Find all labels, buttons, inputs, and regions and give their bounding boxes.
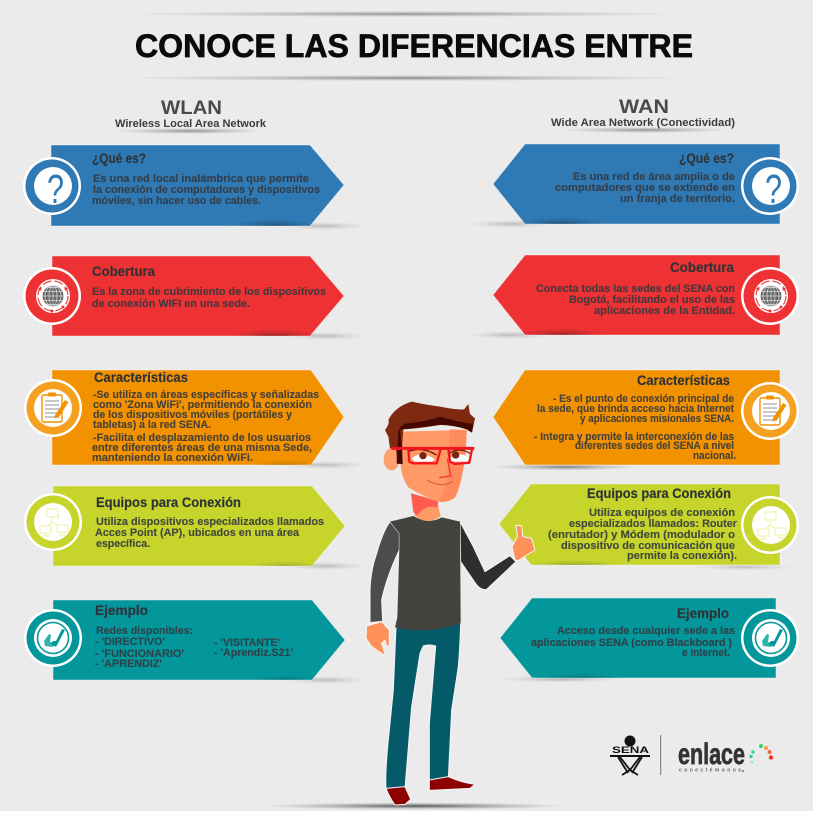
panel: WLAN equipos: [24, 486, 367, 573]
heading: Características: [94, 370, 188, 385]
heading: Cobertura: [670, 260, 734, 275]
text block: manteniendo la conexión WiFi.: [92, 452, 253, 464]
text block: -Facilita el desplazamiento de los usuarios: [93, 432, 311, 444]
icon: question mark: [741, 157, 799, 215]
text block: - Integra y permite la interconexión de las: [534, 431, 734, 443]
text block: móviles, sin hacer uso de cables.: [92, 195, 261, 207]
column heading: WLAN: Wireless Local Area Network: [115, 118, 267, 130]
icon: globe: [741, 267, 799, 325]
icon: check: [741, 609, 799, 667]
column heading: WLAN: [115, 98, 267, 134]
text block: Utiliza dispositivos especializados llamados: [96, 516, 324, 528]
text block: como 'Zona WiFi', permitiendo la conexión: [93, 399, 312, 411]
panel: WAN que es: [468, 144, 799, 233]
text block: aplicaciones SENA (como Blackboard ): [531, 637, 732, 649]
heading: Ejemplo: [677, 606, 729, 621]
column heading: WAN: WAN: [619, 97, 669, 118]
title: CONOCE LAS DIFERENCIAS ENTRE: [135, 28, 693, 64]
text block: Es una red de área amplia o de: [573, 171, 735, 183]
text block: Acceso desde cualquier sede a las: [557, 625, 735, 637]
column heading: WLAN: WLAN: [161, 98, 222, 119]
panel: WAN cobertura: [468, 255, 799, 344]
text block: computadores que se extiende en: [555, 182, 735, 194]
text block: específica.: [96, 538, 150, 550]
panel: WLAN cobertura: [23, 256, 367, 345]
icon: globe: [23, 267, 81, 325]
text block: - 'APRENDIZ': [95, 658, 162, 670]
heading: ¿Qué es?: [92, 151, 146, 166]
icon: question mark: [23, 157, 81, 215]
panel: WLAN que es: [23, 145, 367, 235]
text block: - 'FUNCIONARIO': [95, 648, 184, 660]
logo: enlace conectemonos: enlace: [678, 738, 745, 771]
logo: SENA: SENA: [612, 745, 649, 756]
panel: WAN caracteristicas: [493, 370, 799, 470]
text block: Utiliza equipos de conexión: [589, 507, 735, 519]
text block: [536, 283, 735, 317]
text block: [534, 393, 736, 462]
text block: - 'VISITANTE': [214, 637, 280, 649]
text block: un franja de territorio.: [620, 193, 735, 205]
text block: especializados llamados: Router: [569, 518, 738, 530]
text block: Es una red local inalámbrica que permite: [93, 173, 309, 185]
text block: e Internet.: [682, 647, 730, 659]
heading: Equipos para Conexión: [96, 495, 241, 510]
text block: (enrutador) y Módem (modulador o: [548, 529, 735, 541]
text block: nacional.: [693, 450, 736, 462]
floor shadow: [265, 802, 565, 810]
text block: diferentes sedes del SENA a nivel: [575, 440, 734, 452]
icon: clipboard: [741, 382, 799, 440]
panel: WAN equipos: [499, 484, 799, 572]
column heading: WAN: [551, 97, 735, 133]
text block: [95, 516, 324, 550]
text block: [95, 625, 293, 670]
text block: [531, 625, 735, 659]
text block: [555, 171, 735, 205]
text block: - 'Aprendiz.S21': [214, 647, 293, 659]
text block: permite la conexión).: [627, 550, 737, 562]
logo: enlace conectemonos: conectémonos: [679, 768, 741, 774]
heading: ¿Qué es?: [679, 151, 734, 166]
icon: question mark: ?: [765, 166, 782, 212]
heading: Ejemplo: [95, 603, 148, 618]
text block: [548, 507, 738, 562]
heading: Características: [637, 373, 730, 388]
text block: de los dispositivos móviles (portátiles y: [93, 409, 293, 421]
text block: de conexión WIFI en una sede.: [92, 298, 250, 310]
text block: la sede, que brinda acceso hacia Internet: [537, 403, 734, 415]
text block: [92, 286, 326, 310]
heading: Equipos para Conexión: [587, 486, 731, 501]
icon: network: [24, 493, 82, 551]
text block: entre diferentes áreas de una misma Sede,: [92, 442, 312, 454]
panel: WLAN caracteristicas: [24, 370, 367, 472]
text block: Conecta todas las sedes del SENA con: [536, 283, 735, 295]
heading: Cobertura: [92, 264, 155, 279]
title shadow line: [120, 75, 690, 81]
text block: aplicaciones de la Entidad.: [594, 305, 735, 317]
text block: tabletas) a la red SENA.: [93, 419, 211, 431]
text block: [92, 389, 319, 464]
top shadow line: [125, 11, 685, 17]
text block: la conexión de computadores y dispositivos: [93, 184, 320, 196]
icon: question mark: ?: [47, 166, 64, 212]
panel: WLAN ejemplo: [24, 600, 367, 687]
text block: -Se utiliza en áreas específicas y señalizadas: [93, 389, 319, 401]
icon: check: [24, 609, 82, 667]
logo: SENA: [610, 736, 650, 775]
text block: - Es el punto de conexión principal de: [553, 393, 734, 405]
text block: Es la zona de cubrimiento de los dispositivos: [92, 286, 326, 298]
column heading: WAN: Wide Area Network (Conectividad): [551, 117, 735, 129]
icon: clipboard: [24, 379, 82, 437]
text block: Acces Point (AP), ubicados en una área: [95, 527, 300, 539]
icon: network: [741, 496, 799, 554]
text block: [92, 173, 320, 207]
text block: Redes disponibles:: [96, 625, 193, 637]
text block: - 'DIRECTIVO': [95, 636, 165, 648]
text block: dispositivo de comunicación que: [561, 540, 735, 552]
divider: [660, 735, 661, 775]
character: man with glasses giving thumbs up: [366, 402, 535, 805]
panel: WAN ejemplo: [500, 598, 799, 685]
text block: Bogotá, facilitando el uso de las: [569, 294, 735, 306]
text block: y aplicaciones misionales SENA.: [580, 413, 734, 425]
